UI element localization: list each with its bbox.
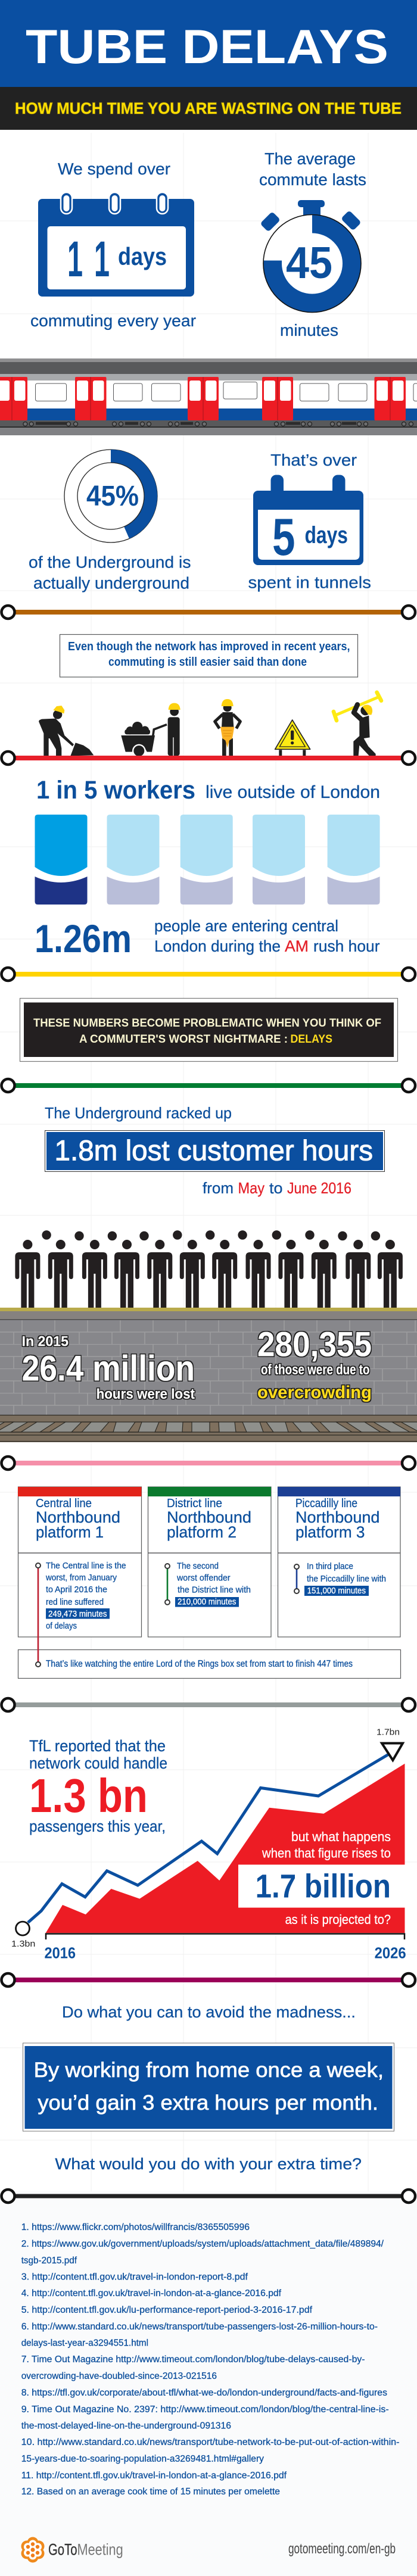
callout: network improved: commuting is still easier said than done xyxy=(108,656,307,669)
callout: Lord of the Rings xyxy=(18,1649,400,1678)
panel: Central line: Central line xyxy=(36,1497,92,1510)
icon: flower xyxy=(21,2537,44,2563)
stat: 1.26m people: London during the xyxy=(154,937,281,955)
panel: Piccadilly line: platform 3 xyxy=(295,1523,365,1541)
heading: 1 in 5 workers: 1 in 5 workers xyxy=(36,776,195,804)
panel: Central line: Northbound xyxy=(36,1508,120,1526)
logo: GoToMeeting: GoTo xyxy=(48,2540,77,2558)
header banner xyxy=(0,0,417,130)
logo: GoToMeeting: Meeting xyxy=(77,2540,123,2558)
stat: 1.8m lost customer hours: from xyxy=(203,1179,234,1197)
panel: Central line: The Central line is the xyxy=(46,1561,126,1571)
stat: 11 days commuting xyxy=(30,160,196,330)
stat: 45% underground: of the Underground is xyxy=(29,553,191,572)
panel: Central line xyxy=(18,1487,142,1637)
stat: 1.26m people xyxy=(35,916,380,960)
rail track xyxy=(0,1415,417,1442)
icon: calendar 5 days: days xyxy=(305,522,348,548)
stat: 1.8m lost customer hours xyxy=(45,1104,385,1197)
tube line divider: red xyxy=(1,751,415,765)
panel: District line: worst offender xyxy=(176,1573,231,1583)
callout: delays nightmare: THESE NUMBERS BECOME PROBLEMATIC WHEN YOU THINK OF xyxy=(33,1016,381,1030)
tube line divider: pink xyxy=(1,1457,415,1470)
stat: 26.4 million hours: 26.4 million xyxy=(22,1348,195,1389)
platform and brick wall xyxy=(0,1308,417,1442)
callout: delays nightmare: A COMMUTER'S WORST NIGHTMARE : xyxy=(79,1033,288,1046)
references list: 2. https://www.gov.uk/government/uploads/system/uploads/attachment_data/file/489894/ xyxy=(21,2239,384,2249)
references list: 15-years-due-to-soaring-population-a3269481.html#gallery xyxy=(21,2454,264,2464)
heading: 1 in 5 workers xyxy=(36,776,380,804)
callout: delays nightmare xyxy=(20,998,398,1061)
stat: 5 days in tunnels: spent in tunnels xyxy=(248,573,371,592)
references list xyxy=(21,2222,399,2497)
sign: working from home: you’d gain 3 extra hours per month. xyxy=(38,2091,378,2115)
panel: Central line: 249,473 minutes xyxy=(48,1609,107,1619)
stat: 1.8m lost customer hours: May xyxy=(238,1179,264,1197)
panel: District line: Northbound xyxy=(167,1508,251,1526)
line and area chart: passengers 2016 to 2026: but what happens xyxy=(291,1829,391,1844)
panel: Piccadilly line: Piccadilly line xyxy=(295,1497,357,1510)
references list: overcrowding-have-doubled-since-2013-021516 xyxy=(21,2371,217,2381)
stat: 45 minute commute xyxy=(259,149,366,339)
callout: Lord of the Rings: That’s like watching the entire Lord of the Rings box set from start to finish 447 times xyxy=(46,1659,353,1669)
text: 1.3 bn passengers xyxy=(29,1737,167,1835)
stat: 1.26m people: 1.26m xyxy=(35,916,132,960)
line and area chart: passengers 2016 to 2026: 1.3bn xyxy=(11,1939,35,1949)
references list: the-most-delayed-line-on-the-underground-091316 xyxy=(21,2421,231,2431)
stat: 45 minute commute: minutes xyxy=(280,321,338,339)
icon: worker with jackhammer xyxy=(215,699,240,756)
line and area chart: passengers 2016 to 2026: 2026 xyxy=(375,1944,406,1961)
icon: worker with wheelbarrow xyxy=(121,703,181,757)
subtitle: HOW MUCH TIME YOU ARE WASTING ON THE TUBE xyxy=(15,99,402,117)
mini line: green xyxy=(165,1564,170,1605)
panel: Piccadilly line: Northbound xyxy=(295,1508,380,1526)
heading: avoid the madness: Do what you can to avoid the madness... xyxy=(62,2003,356,2021)
panel: Piccadilly line: 151,000 minutes xyxy=(307,1586,366,1596)
icon: worker with sledgehammer xyxy=(334,693,381,756)
stat: 1.26m people: AM xyxy=(285,937,309,955)
callout: network improved: Even though the network has improved in recent years, xyxy=(68,640,350,653)
tube line divider: brown xyxy=(1,606,415,619)
stat: 280,355 overcrowding: 280,355 xyxy=(257,1326,372,1364)
references list: delays-last-year-a3294551.html xyxy=(21,2338,148,2349)
panel: District line: the District line with xyxy=(178,1585,251,1595)
icon: calendar 11 days: days xyxy=(118,242,167,270)
stat: 11 days commuting: We spend over xyxy=(58,160,170,178)
title: TUBE DELAYS xyxy=(26,20,388,74)
panel: Piccadilly line xyxy=(278,1487,400,1637)
panel: Central line: of delays xyxy=(46,1621,77,1631)
stat: 5 days in tunnels: That’s over xyxy=(270,451,357,469)
stat: 1.8m lost customer hours: June 2016 xyxy=(287,1179,351,1197)
stat: 26.4 million hours xyxy=(22,1334,195,1402)
pictogram: 1 in 5 blocks xyxy=(35,815,380,905)
text: 1.3 bn passengers: passengers this year, xyxy=(29,1817,166,1835)
train illustration xyxy=(0,358,417,435)
references list: 6. http://www.standard.co.uk/news/transport/tube-passengers-lost-26-million-hours-to- xyxy=(21,2322,378,2332)
panel: Central line: platform 1 xyxy=(36,1523,104,1541)
heading: 1 in 5 workers: live outside of London xyxy=(206,782,380,802)
heading: extra time: What would you do with your extra time? xyxy=(55,2155,362,2173)
stat: 11 days commuting: commuting every year xyxy=(30,311,196,330)
panel: District line: platform 2 xyxy=(167,1523,236,1541)
references list: 1. https://www.flickr.com/photos/willfrancis/8365505996 xyxy=(21,2222,250,2232)
donut chart: 45% xyxy=(86,481,139,512)
panel: Piccadilly line: the Piccadilly line with xyxy=(307,1574,386,1584)
mini line: red xyxy=(36,1563,41,1667)
callout: delays nightmare: DELAYS xyxy=(291,1033,332,1046)
line and area chart: passengers 2016 to 2026: 2016 xyxy=(44,1944,76,1961)
icon: calendar 5 days xyxy=(253,475,363,566)
tube line divider: purple xyxy=(1,1973,415,1986)
icon: stopwatch: 45 xyxy=(286,238,332,288)
stat: 280,355 overcrowding: overcrowding xyxy=(257,1383,372,1402)
references list: 4. http://content.tfl.gov.uk/travel-in-london-at-a-glance-2016.pdf xyxy=(21,2288,282,2299)
tube line divider: grey xyxy=(1,1698,415,1711)
icon: stopwatch xyxy=(260,200,362,312)
references list: 8. https://tfl.gov.uk/corporate/about-tfl/what-we-do/london-underground/facts-and-figures xyxy=(21,2388,387,2398)
references list: 7. Time Out Magazine http://www.timeout.com/london/blog/tube-delays-caused-by- xyxy=(21,2354,365,2365)
sign: 1.8m lost customer hours xyxy=(55,1135,373,1167)
tube line divider: black xyxy=(1,2190,415,2203)
stat: 1.26m people: people are entering central xyxy=(154,917,338,935)
workers illustration xyxy=(39,693,381,757)
icon: warning sign xyxy=(275,720,310,756)
stat: 45% underground: actually underground xyxy=(33,574,189,592)
stat: 45 minute commute: The average xyxy=(264,149,356,168)
stat: 280,355 overcrowding: of those were due to xyxy=(261,1362,369,1378)
references list: 3. http://content.tfl.gov.uk/travel-in-london-report-8.pdf xyxy=(21,2272,248,2282)
stat: 45 minute commute: commute lasts xyxy=(259,170,366,189)
panel: Piccadilly line: In third place xyxy=(307,1561,353,1571)
callout: network improved xyxy=(60,635,357,677)
icon: calendar 11 days: 1 xyxy=(67,231,83,287)
panel: Central line: worst, from January xyxy=(45,1573,117,1583)
references list: 11. http://content.tfl.gov.uk/travel-in-london-at-a-glance-2016.pdf xyxy=(21,2471,287,2481)
references list: 9. Time Out Magazine No. 2397: http://www.timeout.com/london/blog/the-central-line-is- xyxy=(21,2405,389,2415)
line and area chart: passengers 2016 to 2026: 1.7bn xyxy=(376,1727,400,1738)
tube line divider: green xyxy=(1,1079,415,1092)
references list: 5. http://content.tfl.gov.uk/lu-performance-report-period-3-2016-17.pdf xyxy=(21,2305,313,2315)
sign: working from home: By working from home once a week, xyxy=(34,2059,384,2082)
references list: 10. http://www.standard.co.uk/news/transport/tube-network-to-be-put-out-of-action-within- xyxy=(21,2437,399,2447)
icon: calendar 11 days xyxy=(38,192,194,297)
stat: 26.4 million hours: In 2015 xyxy=(22,1334,69,1349)
panel: District line: The second xyxy=(177,1561,219,1571)
icon: worker with shovel xyxy=(39,706,94,756)
stat: 1.8m lost customer hours: to xyxy=(269,1179,282,1197)
donut chart xyxy=(64,450,157,542)
text: 1.3 bn passengers: TfL reported that the xyxy=(29,1737,166,1755)
panel: District line: 210,000 minutes xyxy=(178,1597,236,1607)
mini line: blue xyxy=(294,1564,299,1593)
line and area chart: passengers 2016 to 2026: when that figure rises to xyxy=(262,1846,391,1860)
icon: calendar 11 days: 1 xyxy=(94,231,110,287)
line and area chart: passengers 2016 to 2026 xyxy=(11,1727,406,1961)
stat: 280,355 overcrowding xyxy=(257,1326,372,1402)
tube line divider: yellow xyxy=(1,968,415,981)
panel: Central line: to April 2016 the xyxy=(46,1585,107,1595)
stat: 45% underground xyxy=(29,450,191,592)
icon: calendar 5 days: 5 xyxy=(272,507,295,566)
references list: tsgb-2015.pdf xyxy=(21,2256,77,2266)
line and area chart: passengers 2016 to 2026: as it is projected to? xyxy=(285,1912,391,1927)
text: 1.3 bn passengers: network could handle xyxy=(29,1754,167,1772)
text: 1.3 bn passengers: 1.3 bn xyxy=(29,1769,148,1822)
references list: 12. Based on an average cook time of 15 minutes per omelette xyxy=(21,2487,280,2497)
panel: District line: District line xyxy=(167,1497,222,1510)
stat: 5 days in tunnels xyxy=(248,451,371,592)
logo: GoToMeeting xyxy=(21,2537,123,2563)
crowd of commuters xyxy=(15,1230,403,1308)
callout: 1.7 billion: 1.7 billion xyxy=(256,1867,391,1904)
panel: District line xyxy=(148,1487,271,1637)
stat: 1.8m lost customer hours: The Underground racked up xyxy=(45,1104,232,1122)
sign: working from home xyxy=(23,2043,394,2131)
panel: Central line: red line suffered xyxy=(46,1597,104,1607)
stat: 26.4 million hours: hours were lost xyxy=(97,1386,195,1402)
stat: 1.26m people: rush hour xyxy=(313,937,380,955)
